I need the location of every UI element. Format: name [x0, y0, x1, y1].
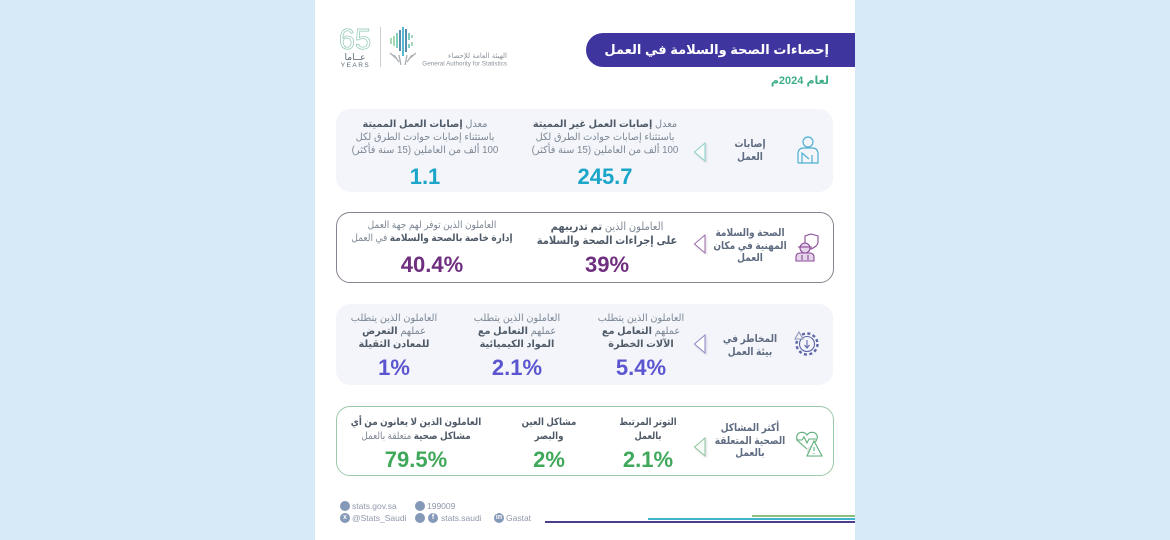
- contact: social handle: stats.saudi: [441, 513, 482, 523]
- stat text: no health problems: [351, 415, 481, 442]
- icon: worker with shield: [795, 233, 819, 262]
- heading: workplace hazards: بيئة العمل: [728, 346, 772, 358]
- stat text: non-fatal injuries rate: باستثناء إصابات حوادث الطرق لكل: [536, 132, 674, 143]
- heading: workplace hazards: [723, 333, 777, 358]
- stat text: eye problems: مشاكل العين: [522, 417, 576, 428]
- heading: work injuries: [734, 138, 766, 162]
- value: 1%: 1%: [378, 355, 410, 380]
- stat text: no health problems: العاملون الذين لا يعانون من أي: [351, 417, 481, 428]
- heading: work injuries: العمل: [737, 150, 763, 162]
- stat text: chemicals: [474, 313, 560, 350]
- stat text: dangerous machinery: الآلات الخطرة: [608, 339, 674, 350]
- footer contacts: [340, 501, 531, 523]
- stat text: fatal injuries rate: [352, 119, 498, 156]
- heading: most common health problems: [715, 420, 785, 459]
- heading: most common health problems: الصحية المتعلقة: [715, 434, 785, 446]
- contact: x handle: @Stats_Saudi: [352, 513, 406, 523]
- icon: phone: [415, 501, 425, 511]
- stat text: fatal injuries rate: معدل إصابات العمل المميتة: [363, 119, 487, 130]
- stat text: heavy metals: عملهم التعرض: [362, 326, 426, 337]
- arrow: [694, 334, 708, 355]
- value: 39%: 39%: [585, 252, 629, 277]
- icon: gear with warning: [794, 331, 819, 356]
- value: 2.1%: 2.1%: [492, 355, 542, 380]
- icon: facebook: [428, 513, 438, 523]
- stat text: heavy metals: [351, 313, 437, 350]
- stat text: chemicals: العاملون الذين يتطلب: [474, 313, 560, 324]
- stat text: no health problems: مشاكل صحية متعلقة بالعمل: [361, 431, 471, 442]
- logo: 65 years and General Authority for Statistics: [339, 24, 507, 69]
- stat text: eye problems: والبصر: [535, 431, 563, 442]
- heading: occupational health and safety: العمل: [737, 252, 763, 264]
- stat text: chemicals: المواد الكيميائية: [480, 339, 554, 350]
- panel: occupational health and safety: [336, 212, 834, 283]
- stat text: work stress: بالعمل: [634, 431, 662, 442]
- icon: web: [340, 501, 350, 511]
- icon: linkedin: [494, 513, 504, 523]
- stat text: heavy metals: للمعادن الثقيلة: [359, 339, 429, 350]
- value: 40.4%: 40.4%: [401, 252, 463, 277]
- contact: linkedin: Gastat: [506, 513, 531, 523]
- stat text: non-fatal injuries rate: [532, 119, 678, 156]
- stat text: dangerous machinery: عملهم التعامل مع: [602, 326, 680, 337]
- panel: workplace hazards: [336, 304, 833, 385]
- heading: work injuries: إصابات: [734, 138, 766, 150]
- white page column: [315, 0, 855, 540]
- value: 245.7: 245.7: [577, 164, 633, 189]
- stat text: chemicals: عملهم التعامل مع: [478, 326, 556, 337]
- icon: injured worker: [797, 136, 819, 164]
- stat text: fatal injuries rate: باستثناء إصابات حوادث الطرق لكل: [356, 132, 494, 143]
- stat text: work stress: التوتر المرتبط: [619, 417, 677, 428]
- icon: linkedin: in: [496, 514, 502, 521]
- heading: occupational health and safety: الصحة والسلامة: [715, 227, 785, 239]
- icon: facebook: f: [432, 514, 434, 521]
- subtitle: year: لعام 2024م: [771, 75, 829, 87]
- icon: instagram: [415, 513, 425, 523]
- stat text: non-fatal injuries rate: معدل إصابات العمل غير المميتة: [533, 119, 677, 130]
- stat text: work stress: [619, 417, 677, 442]
- stat text: heavy metals: العاملون الذين يتطلب: [351, 313, 437, 324]
- heading: workplace hazards: المخاطر في: [723, 333, 777, 345]
- stat text: non-fatal injuries rate: 100 ألف من العاملين (15 سنة فأكثر): [532, 145, 678, 156]
- stat text: safety management: إدارة خاصة بالصحة والسلامة في العمل: [351, 232, 513, 244]
- heading: occupational health and safety: المهنية في مكان: [713, 240, 787, 252]
- title banner: [586, 33, 855, 67]
- panel: health problems: [336, 406, 834, 476]
- logo: 65 years and General Authority for Statistics: General Authority for Statistics: [422, 60, 507, 68]
- heading: occupational health and safety: [713, 227, 787, 264]
- heading: most common health problems: أكثر المشاكل: [721, 422, 779, 434]
- icon: heart and warning: [796, 432, 823, 457]
- stat text: safety management: [351, 220, 513, 244]
- arrow: [694, 437, 708, 458]
- stat text: safety management: العاملون الذين توفر لهم جهة العمل: [368, 220, 496, 231]
- icon: x: x: [343, 514, 347, 521]
- title: إحصاءات الصحة والسلامة في العمل: [604, 42, 829, 57]
- value: 2.1%: 2.1%: [623, 447, 673, 472]
- logo: 65 years and General Authority for Statistics: YEARS: [341, 62, 370, 69]
- stat text: dangerous machinery: العاملون الذين يتطلب: [598, 313, 684, 324]
- contact: website: stats.gov.sa: [352, 501, 397, 511]
- footer stripes: [545, 515, 855, 523]
- stat text: safety training: العاملون الذين تم تدريبهم: [551, 221, 663, 233]
- stat text: eye problems: [522, 417, 576, 442]
- arrow: [694, 142, 708, 163]
- logo: 65 years and General Authority for Statistics: الهيئة العامة للإحصاء: [448, 52, 507, 60]
- heading: most common health problems: بالعمل: [735, 447, 765, 459]
- logo: 65 years and General Authority for Statistics: 65: [339, 24, 371, 56]
- arrow: [694, 234, 708, 255]
- value: 1.1: 1.1: [410, 164, 440, 189]
- stat text: safety training: [537, 221, 677, 247]
- logo: 65 years and General Authority for Statistics: عــاما: [345, 53, 365, 63]
- stat text: fatal injuries rate: 100 ألف من العاملين (15 سنة فأكثر): [352, 145, 498, 156]
- value: 2%: 2%: [533, 447, 565, 472]
- icon: x: [340, 513, 350, 523]
- value: 79.5%: 79.5%: [385, 447, 447, 472]
- stat text: safety training: على إجراءات الصحة والسلامة: [537, 235, 677, 247]
- value: 5.4%: 5.4%: [616, 355, 666, 380]
- panel: work injuries: [336, 109, 833, 192]
- contact: phone: 199009: [427, 501, 455, 511]
- stat text: dangerous machinery: [598, 313, 684, 350]
